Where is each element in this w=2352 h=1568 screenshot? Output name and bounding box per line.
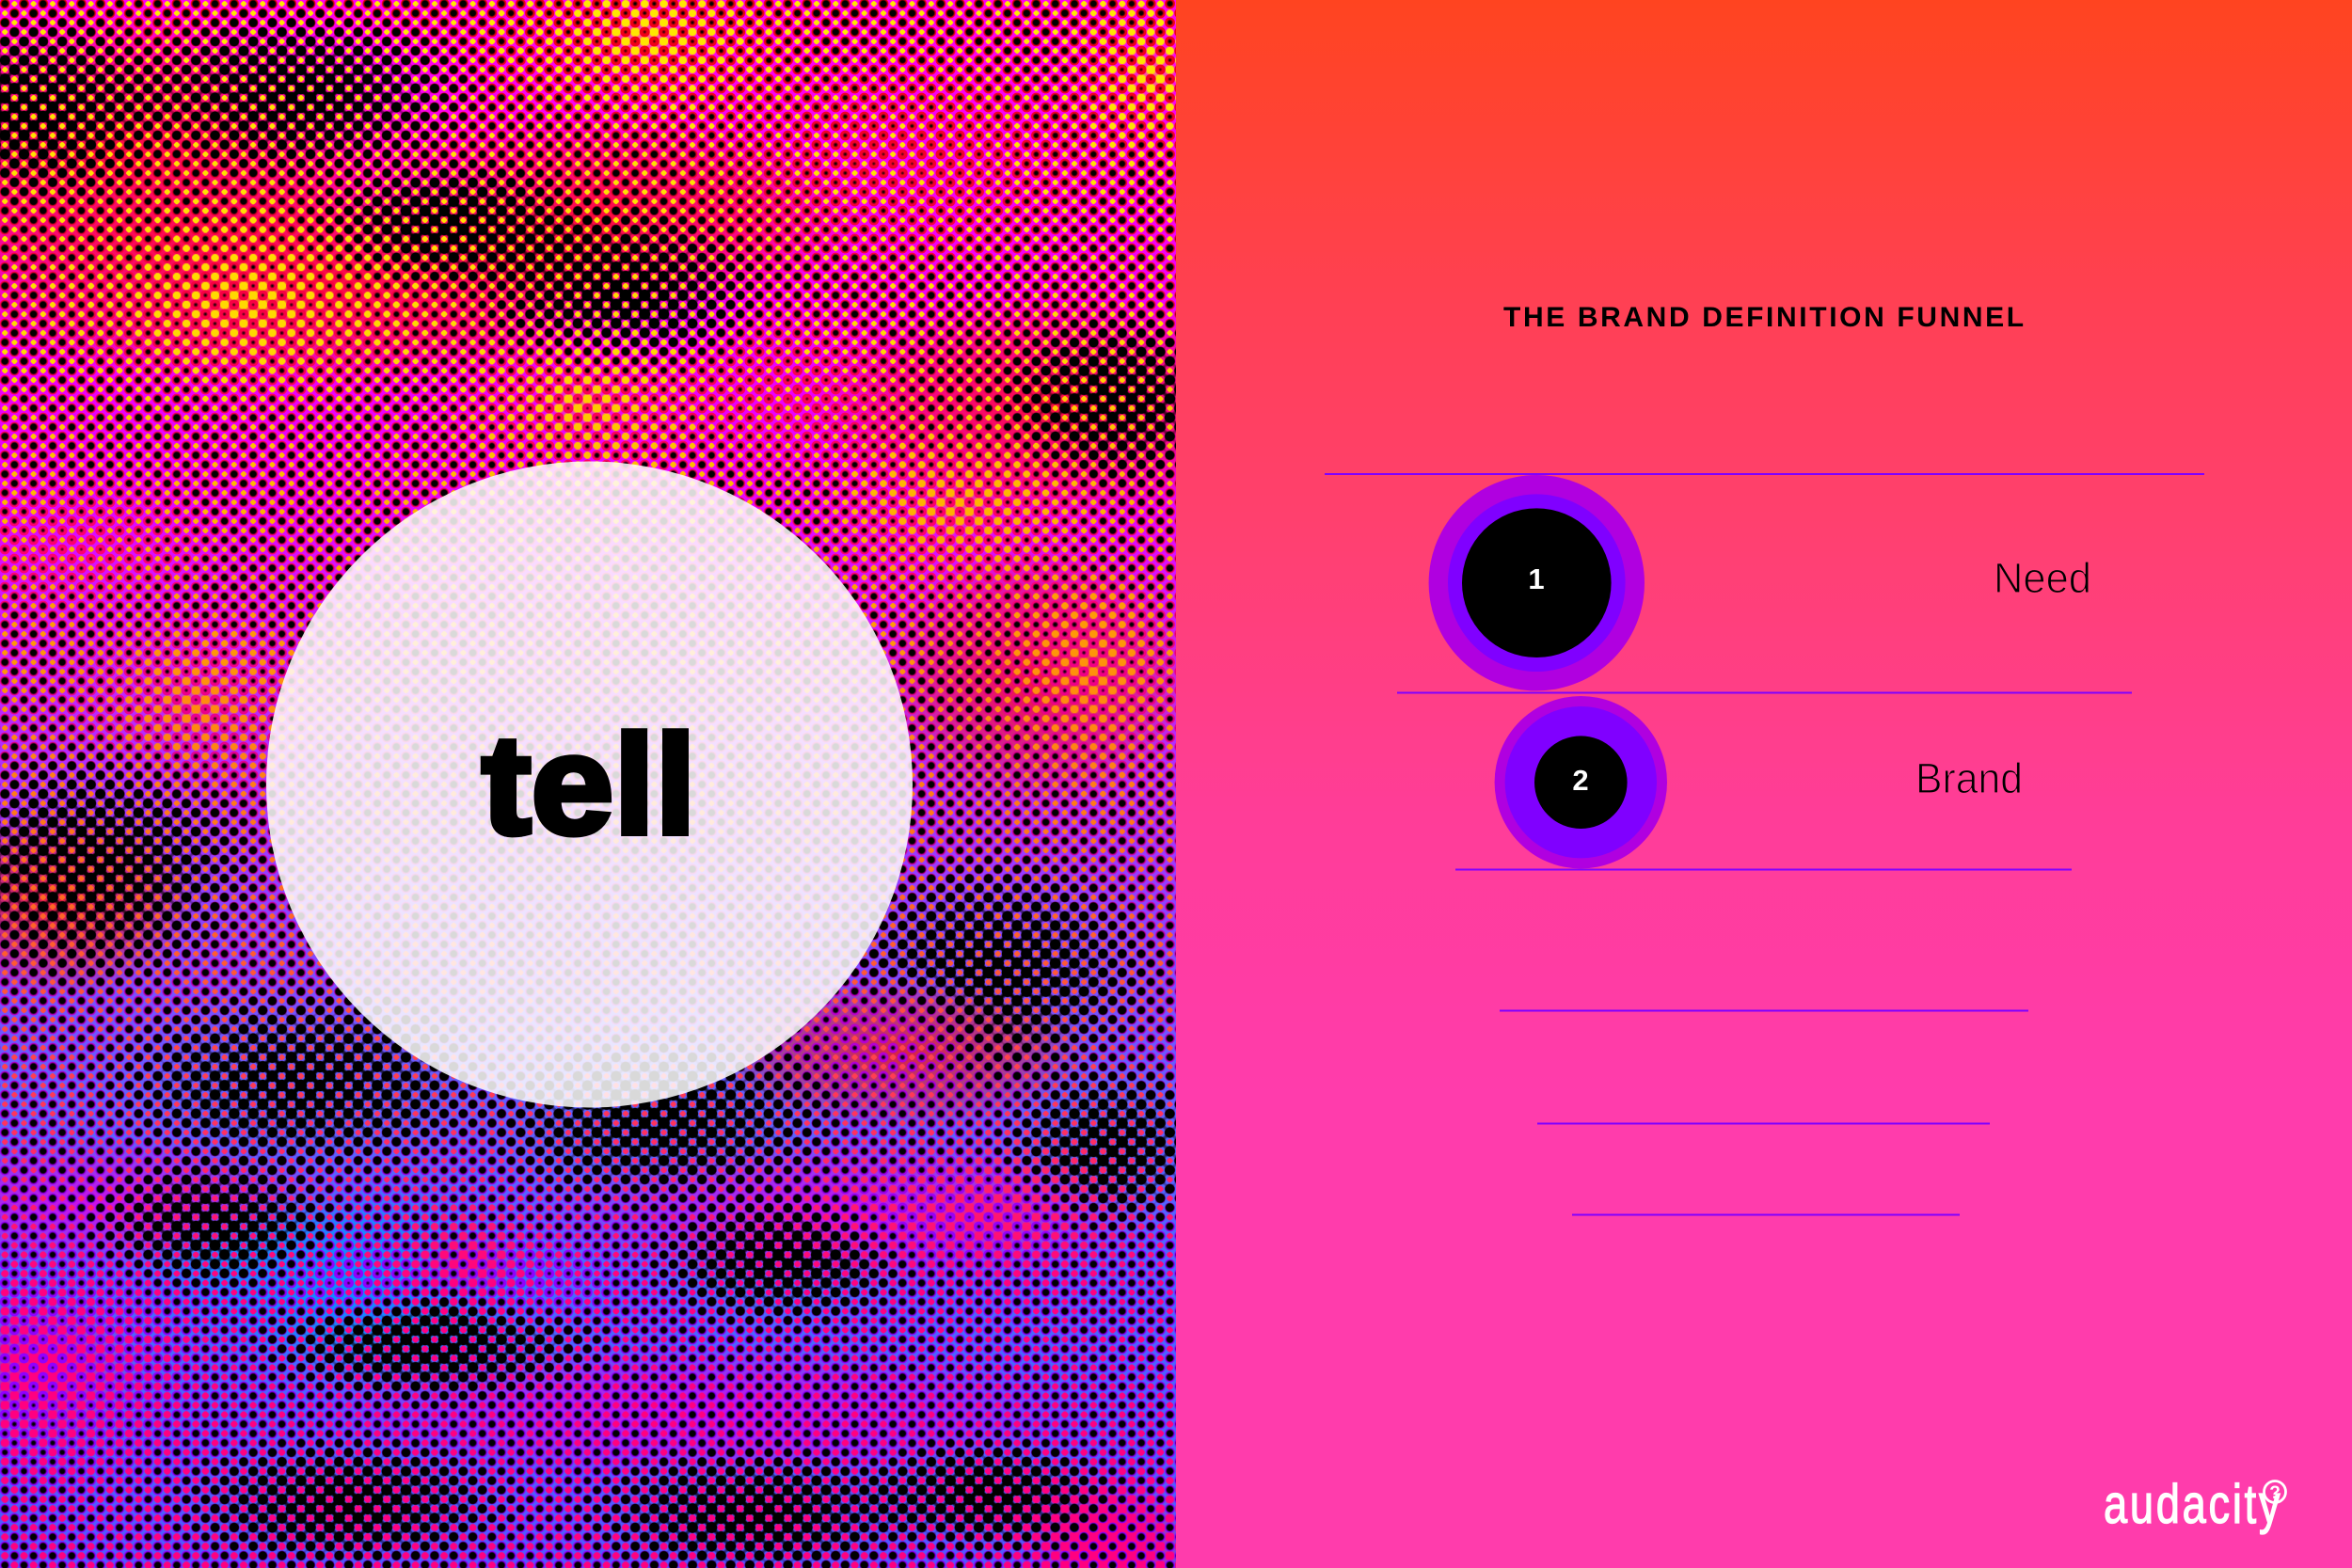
funnel step 2 marker [1495, 696, 1667, 868]
halftone gap colour layer [0, 0, 1176, 1568]
word: tell: tell [482, 705, 696, 863]
panel: funnel background [1176, 0, 2352, 1568]
logo: audacity: audacity [2104, 1475, 2282, 1535]
halftone black dot layer [0, 0, 1258, 1568]
funnel step 1 marker [1429, 475, 1645, 690]
step number 2: 2 [1572, 764, 1589, 797]
halftone inner ink ring layer [0, 0, 1176, 1568]
logo question mark badge [2264, 1481, 2286, 1503]
logo question mark badge: ? [2269, 1483, 2280, 1503]
step number 1: 1 [1528, 562, 1545, 595]
translucent white circle [266, 461, 913, 1108]
funnel divider lines [1325, 474, 2204, 1215]
halftone outer ink ring layer [0, 0, 1298, 1568]
panel: halftone image [0, 0, 1298, 1568]
label: need: Need [1994, 554, 2091, 602]
label: brand: Brand [1915, 754, 2023, 802]
heading: the brand definition funnel: THE BRAND DEFINITION FUNNEL [1503, 302, 2026, 333]
